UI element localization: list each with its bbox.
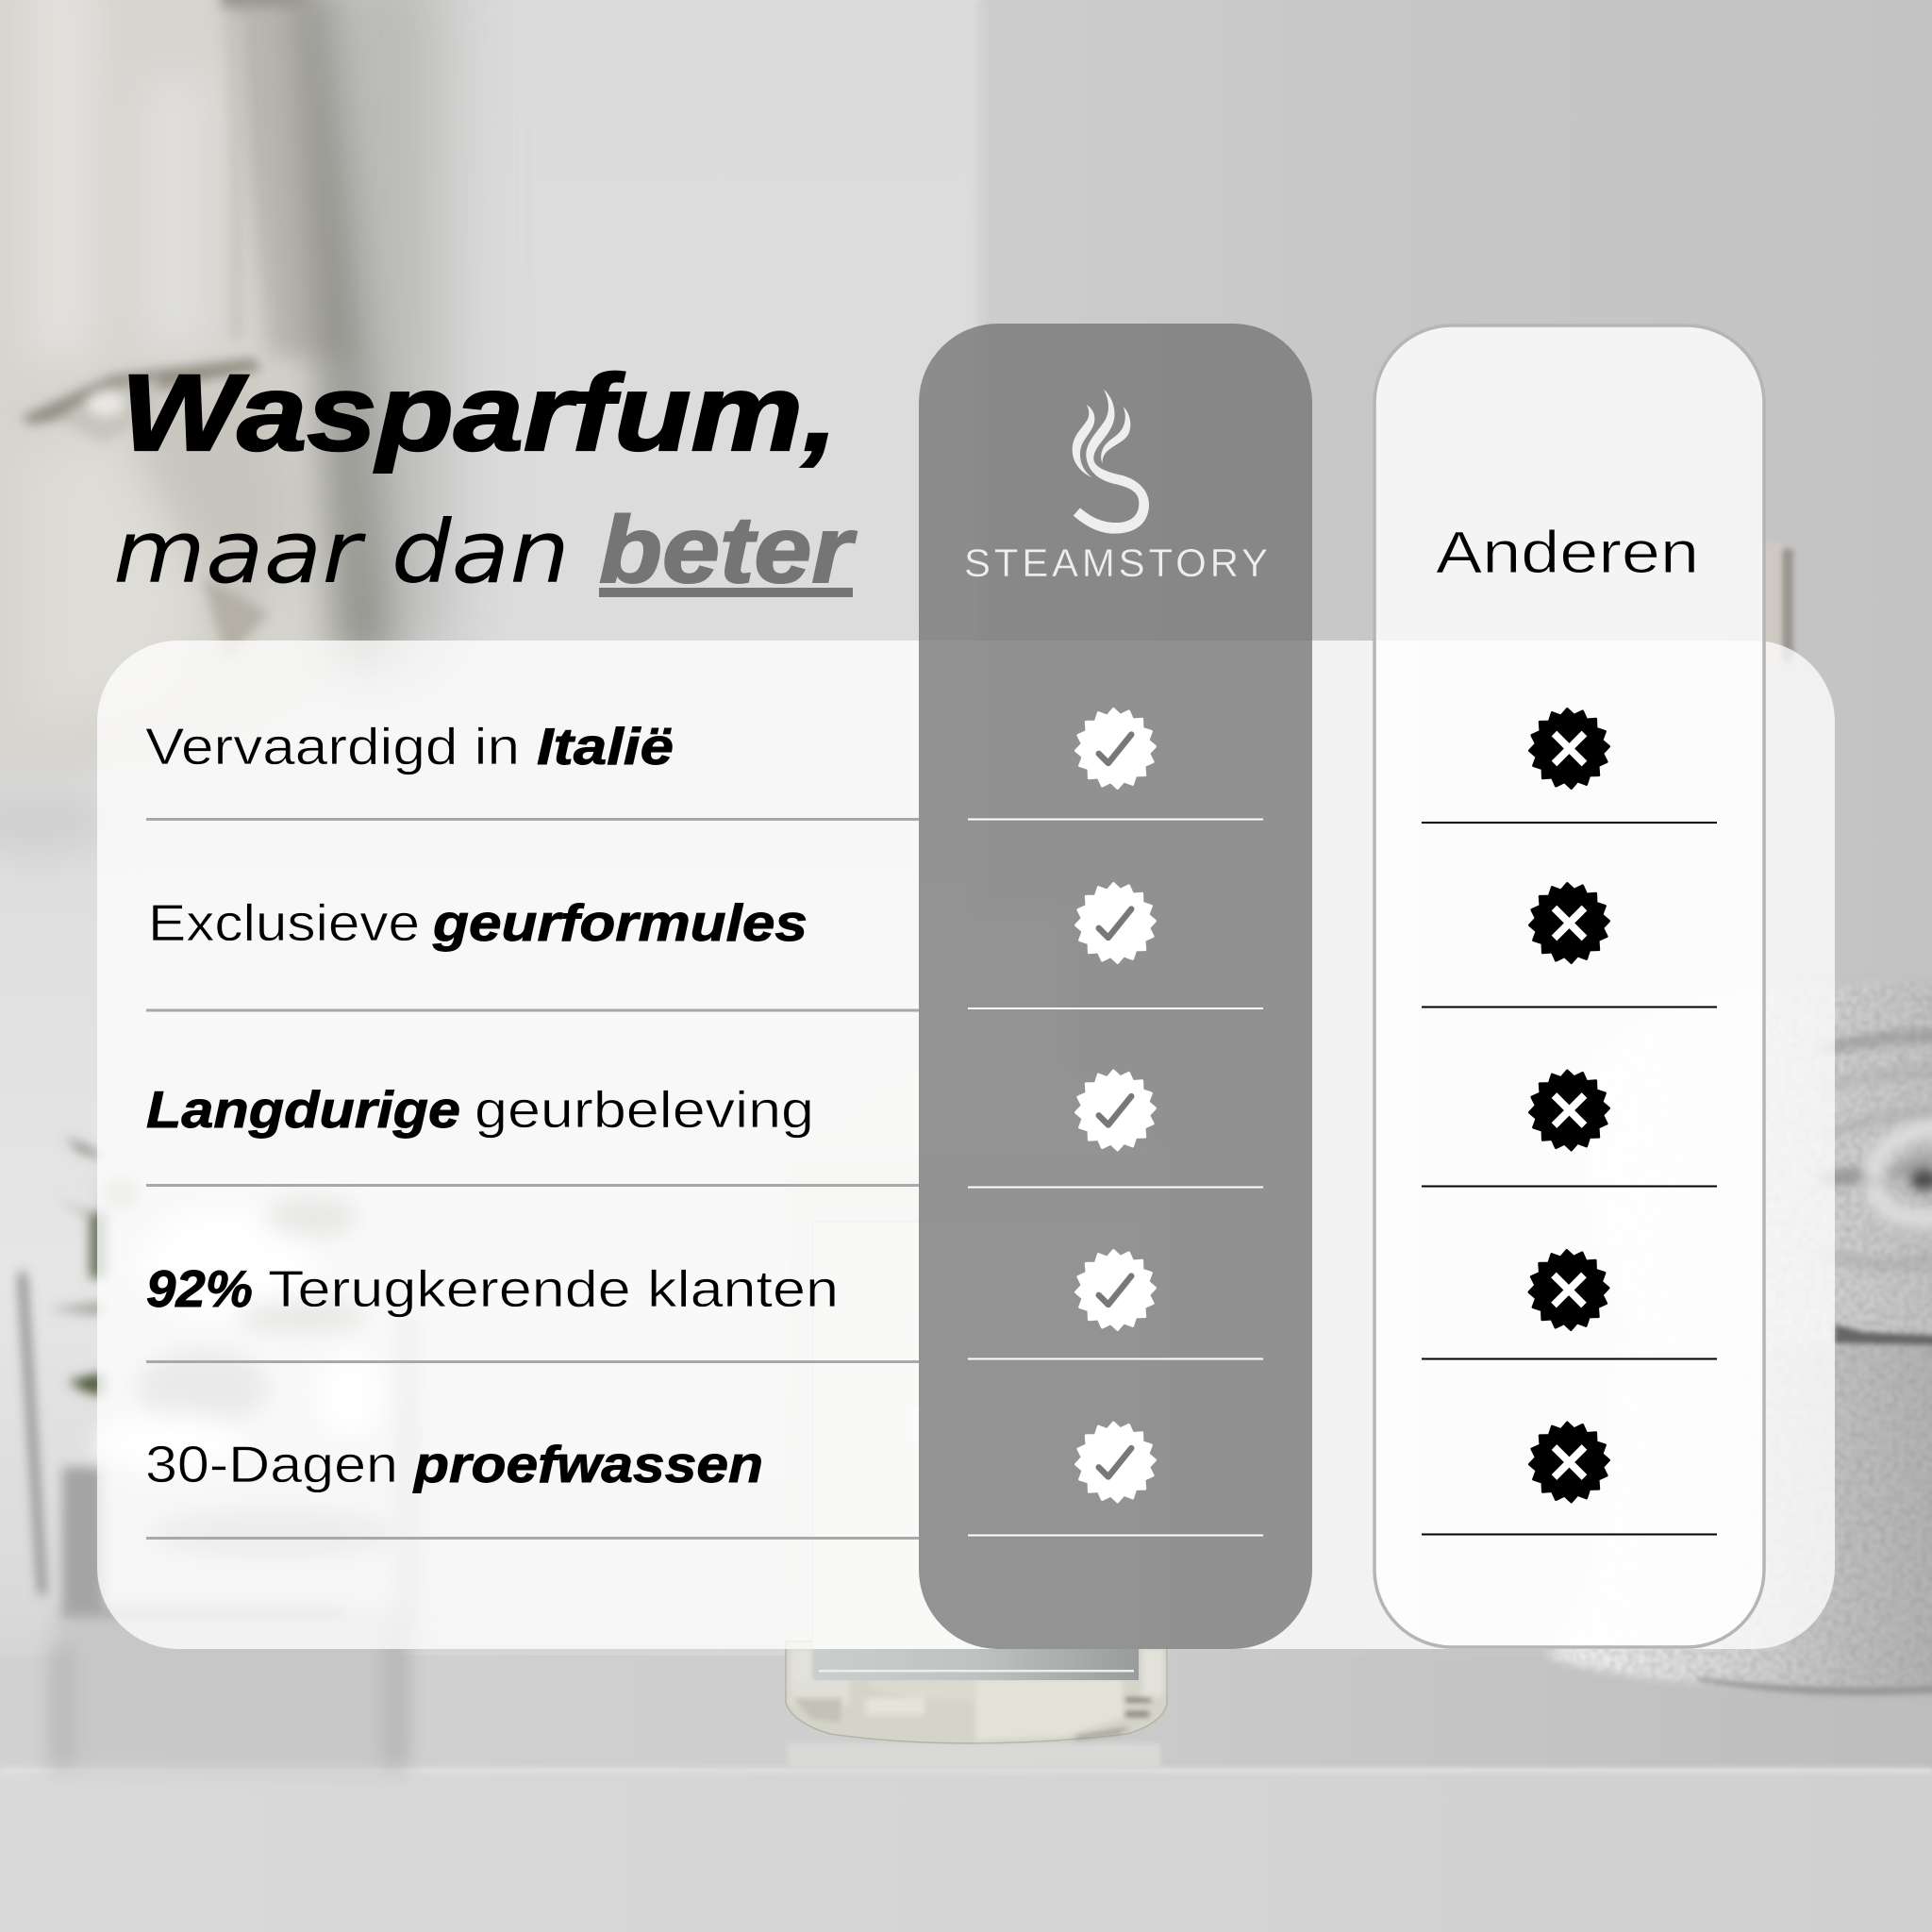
column heading: Anderen: Anderen: [1436, 520, 1699, 586]
icon: cross badge: [1527, 1069, 1611, 1152]
logo: STEAMSTORY: [964, 390, 1268, 585]
row 5: 30-Dagen proefwassen: [145, 1421, 1717, 1540]
row 4 label: 92%: [146, 1259, 253, 1318]
heading: Wasparfum: Wasparfum,: [121, 353, 838, 474]
logo wordmark: STEAMSTORY: [964, 541, 1268, 585]
row 1 label: [145, 717, 674, 775]
icon: check badge: [1074, 881, 1158, 965]
row 5 label: [145, 1435, 763, 1493]
row 3 label: [146, 1080, 814, 1139]
panel: Anderen column: [1374, 325, 1764, 1647]
heading: beter: beter: [599, 497, 858, 603]
row 3 label: Langdurige: [146, 1080, 460, 1139]
row 1 label: Italië: [537, 717, 674, 775]
row 5 label: 30-Dagen: [145, 1435, 398, 1493]
icon: check badge: [1074, 1069, 1158, 1152]
row 4: 92% Terugkerende klanten: [146, 1248, 1717, 1363]
row 1: Vervaardigd in Italië: [145, 707, 1717, 824]
icon: cross badge: [1527, 881, 1611, 965]
title: [113, 353, 858, 603]
icon: steam S: [1073, 390, 1149, 534]
panel: STEAMSTORY column: [919, 324, 1312, 1649]
bottle: STEAMSTORY: [913, 1315, 1045, 1339]
icon: check badge: [1074, 1248, 1158, 1332]
wall shadow beside hanging towel: [321, 0, 443, 670]
panel: comparison rows background: [97, 641, 1835, 1649]
row 2 label: geurformules: [432, 893, 808, 952]
rolled towels on the right: [1547, 980, 1932, 1695]
icon: check badge: [1074, 1421, 1158, 1504]
row 2 label: Exclusieve: [148, 893, 420, 952]
row 3 label: geurbeleving: [475, 1080, 814, 1139]
row 4 label: Terugkerende klanten: [268, 1259, 839, 1318]
row 1 label: Vervaardigd in: [145, 717, 520, 775]
small beige object on wall: [1762, 542, 1793, 665]
row 5 label: proefwassen: [412, 1435, 763, 1493]
bottle: PEARL: [908, 1395, 1049, 1452]
row 3: Langdurige geurbeleving: [146, 1069, 1717, 1189]
icon: check badge: [1074, 707, 1158, 791]
bottle: [786, 910, 1167, 1768]
hanging towel: [0, 0, 389, 783]
flowers behind the panel: [94, 1179, 396, 1557]
heading: maar dan: maar dan: [113, 502, 570, 603]
icon: cross badge: [1527, 707, 1611, 791]
row 2: Exclusieve geurformules: [146, 881, 1717, 1011]
vase and table on the left: [19, 1137, 413, 1769]
icon: cross badge: [1527, 1248, 1610, 1332]
icon: cross badge: [1527, 1421, 1611, 1504]
row 2 label: [148, 893, 808, 952]
